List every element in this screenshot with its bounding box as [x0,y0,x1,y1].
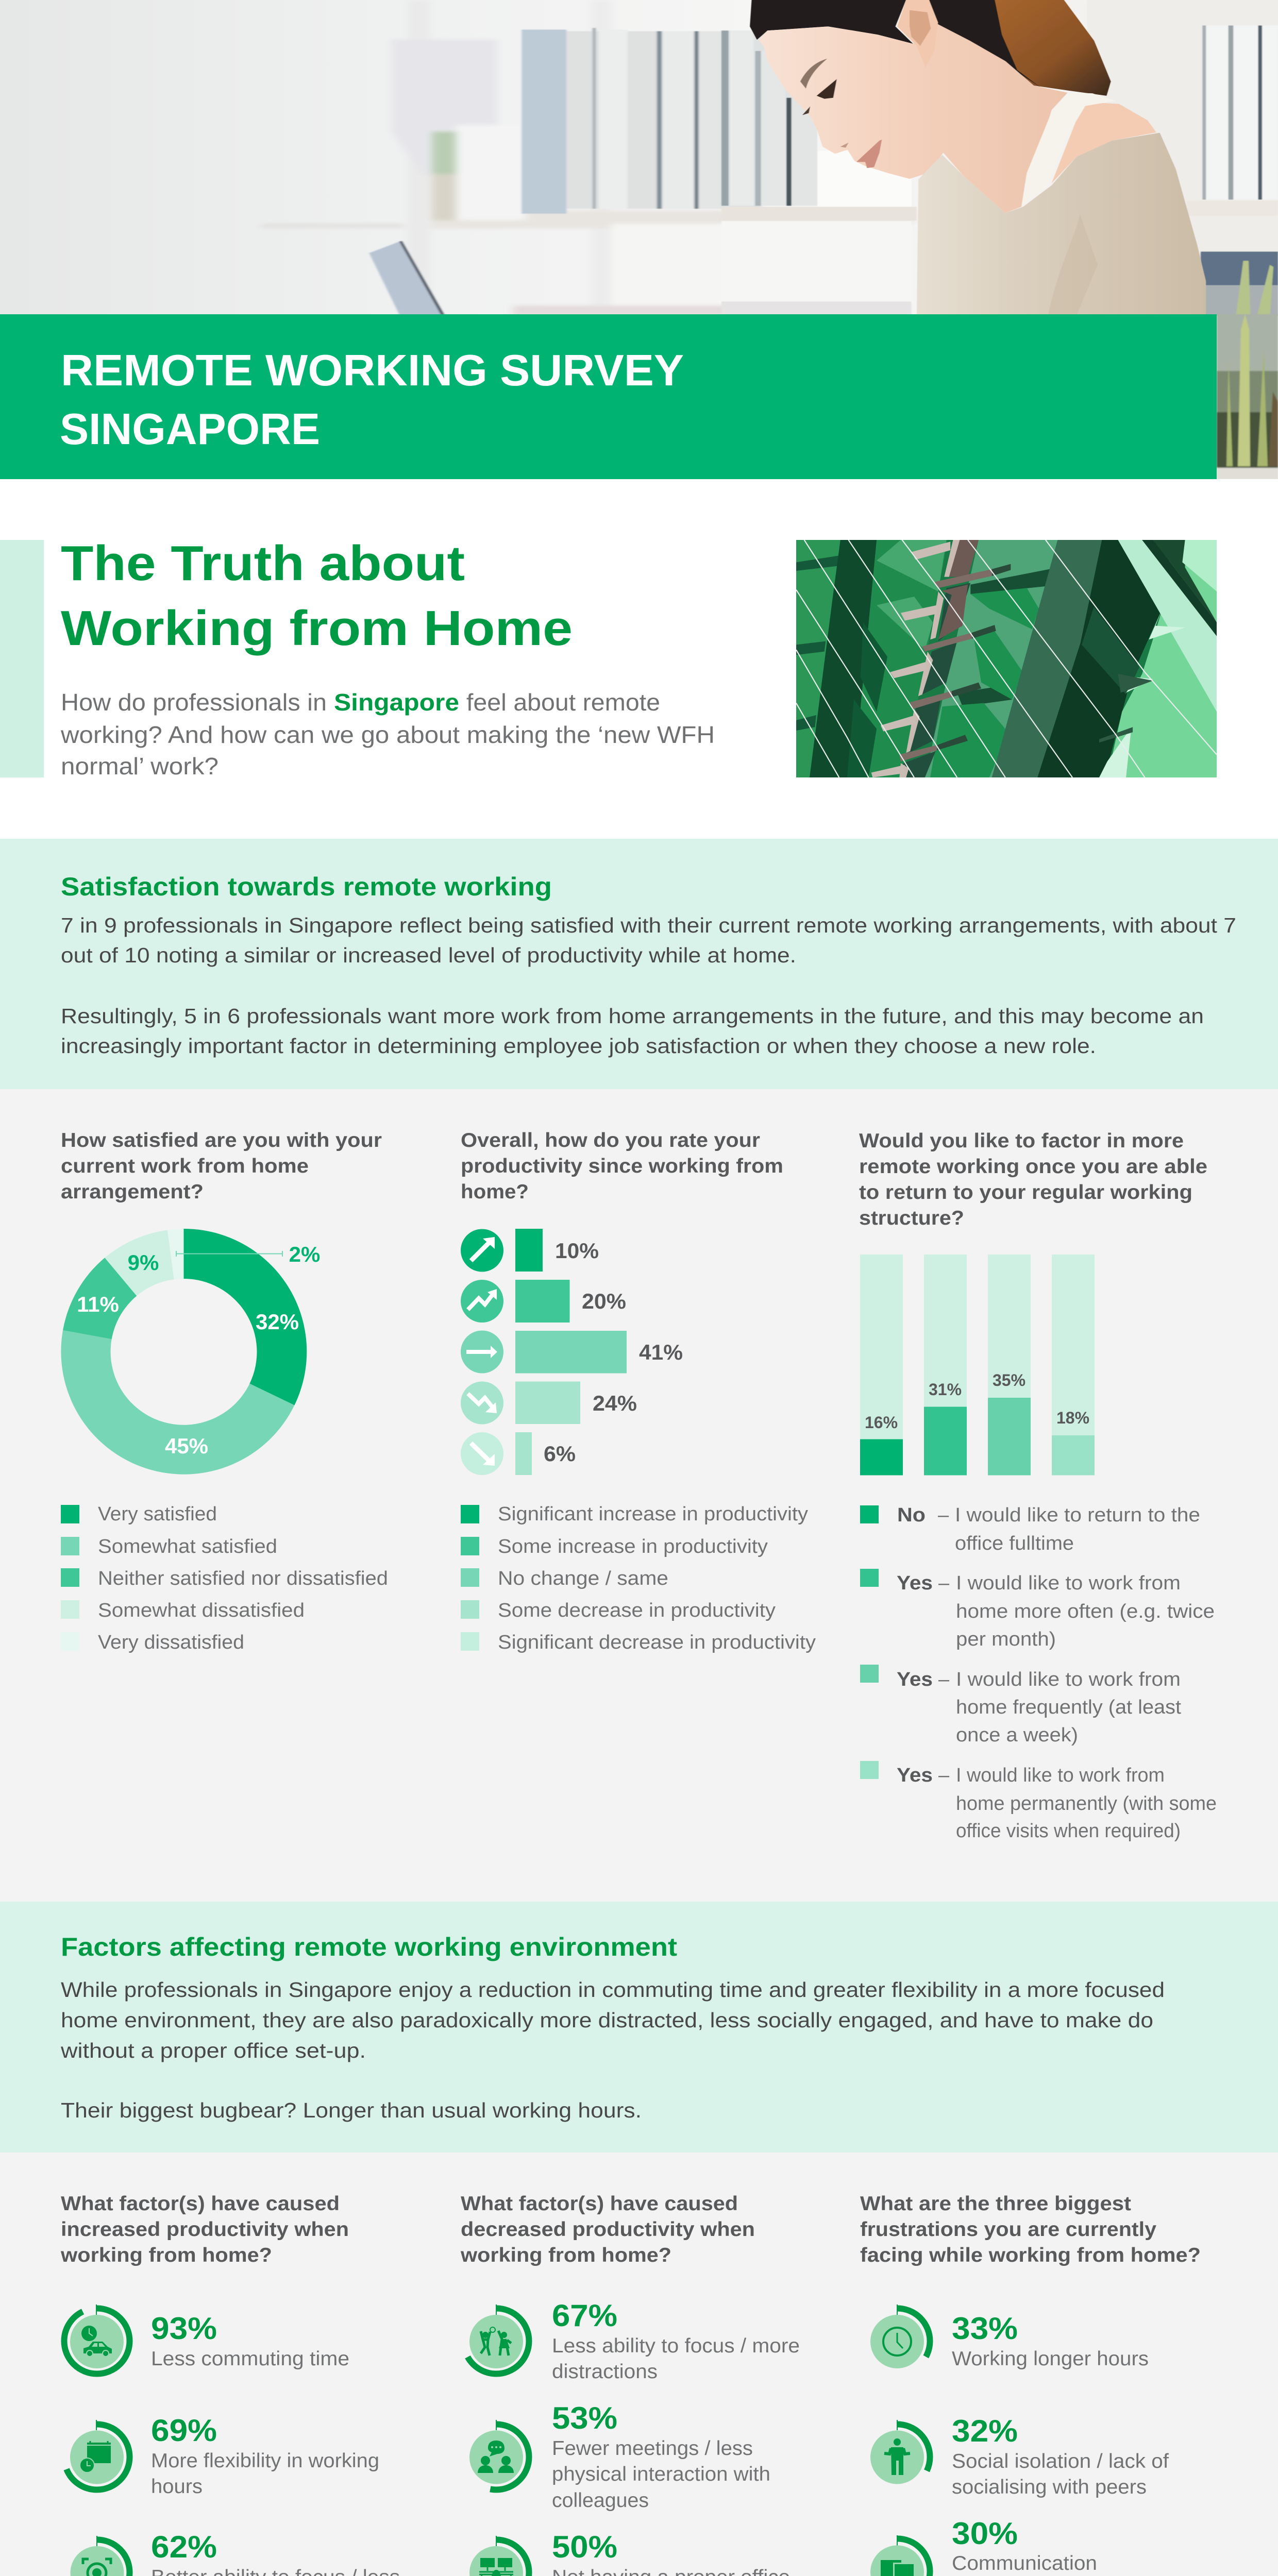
question heading: What factor(s) have caused [61,2193,340,2215]
background wall right [1087,0,1278,252]
stat: 67% [552,2298,800,2383]
legend: home more often (e.g. twice [956,1601,1215,1622]
question heading [61,1129,382,1203]
hero photo: woman working at laptop [0,0,1278,479]
bars: 20% [582,1289,626,1313]
bar chart: 31% [929,1380,962,1399]
stat: 67%: Less ability to focus / more [552,2335,800,2357]
icon: office desk, 50% ring [464,2536,529,2576]
main heading: Working from Home [61,601,573,656]
ladder column [938,540,979,639]
stat: 93% [151,2311,349,2370]
brow, eyes, nostril, lips [800,59,827,89]
legend: per month) [956,1629,1056,1650]
text block: factors summary: Their biggest bugbear? Longer than usual working hours. [61,2098,642,2122]
dark window [1037,540,1172,777]
bars: 6% [544,1442,576,1466]
banner: survey title [0,314,1217,479]
text block: factors summary: While professionals in Singapore enjoy a reduction in commuting time and greater flexibility in a more focused [61,1978,1165,2002]
stat: 67%: 67% [552,2298,617,2333]
legend: No [897,1504,926,1526]
question heading: remote working once you are able [859,1156,1207,1178]
donut chart [61,1229,320,1475]
legend: Significant increase in productivity [498,1503,808,1525]
bar chart: 16% [865,1413,898,1432]
question heading [860,2193,1201,2266]
main heading: The Truth about [61,536,465,591]
legend: Significant decrease in productivity [498,1632,816,1653]
intro text: Singapore [334,689,459,716]
stat: 32%: socialising with peers [952,2476,1147,2498]
legend: I would like to work from [956,1572,1181,1594]
intro text [60,689,715,779]
legend: Very dissatisfied [98,1632,244,1653]
legend: Neither satisfied nor dissatisfied [98,1568,388,1589]
stat: 53%: colleagues [552,2489,649,2512]
stat: 67%: distractions [552,2361,658,2383]
banner title text: REMOTE WORKING SURVEY [61,346,684,395]
stat: 69%: hours [151,2476,203,2498]
heading: factors: Factors affecting remote working environment [61,1933,677,1961]
legend: – [938,1572,950,1594]
panel: factors intro [0,1902,1278,2153]
question heading: How satisfied are you with your [61,1129,382,1151]
legend: – [938,1765,950,1786]
text block: satisfaction summary: increasingly important factor in determining employee job satisfaction or when they choose a new role. [61,1034,1096,1058]
stat: 69% [151,2413,379,2498]
stat: 50%: 50% [552,2530,617,2564]
text block: satisfaction summary [61,913,1236,1058]
question heading [461,1129,783,1203]
icon: meeting people, 53% ring [464,2420,529,2489]
dark hair [750,0,1041,88]
question heading: Overall, how do you rate your [461,1129,760,1151]
legend [461,1503,816,1653]
donut chart: 32% [256,1310,299,1334]
stat: 53%: Fewer meetings / less [552,2437,753,2460]
laptop [369,242,444,315]
legend: Some decrease in productivity [498,1600,776,1621]
stat: 50% [552,2530,790,2576]
text block: factors summary [60,1978,1165,2122]
light right side [1107,540,1217,777]
stat: 62% [151,2530,400,2576]
question heading [460,2193,755,2266]
question heading [859,1130,1207,1229]
shoulder [1052,102,1156,183]
stat: 32%: Social isolation / lack of [952,2450,1169,2472]
stat: 53%: 53% [552,2401,617,2435]
legend: I would like to return to the [955,1504,1200,1526]
stat: 69%: 69% [151,2413,217,2448]
plant [1217,314,1278,479]
legend: I would like to work from [956,1765,1165,1786]
question heading: working from home? [460,2244,671,2266]
question heading [60,2193,349,2266]
legend: Yes [897,1765,933,1786]
stat: 30% [951,2516,1158,2576]
question heading: productivity since working from [461,1155,783,1177]
panel: satisfaction donut chart [61,1129,388,1653]
legend: Somewhat dissatisfied [98,1600,305,1621]
stat: 32% [952,2414,1169,2498]
glass band [992,540,1102,777]
stat: 33% [952,2311,1149,2370]
panel: productivity rating chart [461,1129,816,1653]
question heading: current work from home [61,1155,309,1177]
question heading: to return to your regular working [859,1181,1192,1204]
stat: 33%: 33% [952,2311,1018,2346]
panel: biggest frustrations [860,2193,1201,2576]
thin cables [796,540,1217,777]
icon: clock, 33% ring [865,2304,930,2374]
panel: increased productivity factors [60,2193,400,2576]
legend: Yes [897,1669,933,1690]
stat: 32%: 32% [952,2414,1018,2448]
chair [1201,251,1278,286]
face and neck [759,22,1068,213]
stat: 93%: Less commuting time [151,2348,349,2370]
icon: speech bubbles, 30% ring [865,2535,930,2576]
question heading: arrangement? [61,1181,204,1203]
icon: clock and car, 93% ring [64,2304,130,2374]
panel: satisfaction intro [0,839,1278,1089]
donut chart: 9% [128,1250,159,1275]
photo: green building facade [796,540,1217,777]
legend: office fulltime [955,1533,1074,1554]
question heading: What are the three biggest [860,2193,1131,2215]
banner title text [60,346,684,454]
panel: return to work preference chart [859,1130,1217,1842]
intro text: How do professionals in [61,689,327,716]
stat: 93%: 93% [151,2311,217,2346]
stat: 53%: physical interaction with [552,2463,770,2485]
legend: Very satisfied [98,1503,217,1525]
text block: satisfaction summary: out of 10 noting a similar or increased level of productivity while at home. [61,943,796,967]
icons: trend arrows [461,1229,503,1475]
bar chart: 35% [993,1371,1025,1389]
stat: 62%: 62% [151,2530,217,2564]
intro text: working? And how can we go about making the ‘new WFH [60,721,715,748]
text block: satisfaction summary: Resultingly, 5 in 6 professionals want more work from home arrangements in the future, and this may become an [61,1004,1204,1028]
banner title text: SINGAPORE [60,405,320,454]
legend: – [938,1504,949,1526]
bars: 10% [555,1239,599,1263]
legend: once a week) [956,1724,1078,1746]
ponytail [984,0,1111,96]
question heading: frustrations you are currently [860,2218,1156,2241]
question heading: decreased productivity when [461,2218,755,2241]
legend: Yes [897,1572,933,1594]
icon: focus target, 62% ring [64,2536,130,2576]
text block: satisfaction summary: 7 in 9 professionals in Singapore reflect being satisfied with their current remote working arrangements, with about 7 [61,913,1236,937]
ear [897,0,938,67]
question heading: structure? [859,1207,964,1229]
bars: 41% [639,1340,683,1364]
stat: 30%: 30% [952,2516,1018,2551]
legend [61,1503,388,1653]
question heading: working from home? [60,2244,272,2266]
text block: factors summary: without a proper office set-up. [60,2039,366,2062]
donut chart: 11% [77,1292,119,1316]
sweater [917,133,1206,316]
central mesh [925,540,1057,777]
stat: 53% [552,2401,770,2512]
icon: calendar and stopwatch, 69% ring [64,2420,130,2489]
legend: office visits when required) [956,1820,1181,1842]
stat: 30%: Communication [952,2552,1097,2574]
main heading [61,536,573,656]
legend: I would like to work from [956,1669,1181,1690]
bar chart [860,1255,1095,1476]
panel: decreased productivity factors [460,2193,800,2576]
legend: No change / same [498,1568,668,1589]
donut chart: 2% [289,1242,320,1266]
text block: factors summary: home environment, they are also paradoxically more distracted, less socially engaged, and have to make do [61,2008,1153,2032]
legend: – [938,1669,950,1690]
question heading: What factor(s) have caused [461,2193,738,2215]
icon: playing children, 67% ring [464,2304,529,2374]
stat: 33%: Working longer hours [952,2348,1149,2370]
question heading: increased productivity when [61,2218,349,2241]
icon: isolated person, 32% ring [865,2420,930,2489]
heading: satisfaction: Satisfaction towards remote working [61,872,552,901]
intro accent bar [0,540,44,777]
donut chart: 45% [165,1434,208,1458]
legend: Some increase in productivity [498,1536,768,1557]
intro text: normal’ work? [61,753,218,779]
legend: home frequently (at least [956,1697,1181,1718]
bar chart: 18% [1056,1409,1089,1427]
bars: 24% [593,1391,637,1415]
intro text: feel about remote [466,689,660,716]
legend: Somewhat satisfied [98,1536,277,1557]
question heading: facing while working from home? [860,2244,1201,2266]
legend [860,1504,1217,1842]
bars [515,1229,683,1475]
legend: home permanently (with some [956,1793,1217,1815]
white strap [1021,93,1116,207]
background shelf left [729,30,793,206]
stat: 69%: More flexibility in working [151,2450,379,2472]
question heading: Would you like to factor in more [859,1130,1184,1152]
question heading: home? [461,1181,529,1203]
